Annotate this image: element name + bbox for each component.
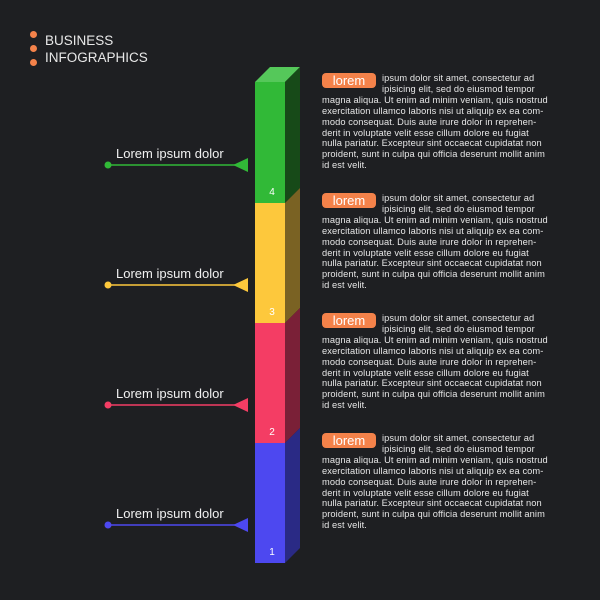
- text block 1: id est velit.: [322, 520, 367, 530]
- text block 1: derit in voluptate velit esse cillum dolore eu fugiat: [322, 488, 529, 498]
- text block 1: ipsum dolor sit amet, consectetur ad: [382, 433, 534, 443]
- title: BUSINESS: [45, 33, 113, 48]
- text block 3: nulla pariatur. Excepteur sint occaecat cupidatat non: [322, 258, 542, 268]
- text block 1: [322, 433, 548, 530]
- text block 4: proident, sunt in culpa qui officia deserunt mollit anim: [322, 149, 545, 159]
- text block 1: lorem: [333, 433, 365, 448]
- text block 1: nulla pariatur. Excepteur sint occaecat cupidatat non: [322, 498, 542, 508]
- label 1: Lorem ipsum dolor: [116, 506, 224, 521]
- text block 3: lorem: [333, 193, 365, 208]
- text block 4: ipisicing elit, sed do eiusmod tempor: [382, 84, 535, 94]
- text block 1: magna aliqua. Ut enim ad minim veniam, quis nostrud: [322, 455, 548, 465]
- text block 1: modo consequat. Duis aute irure dolor in reprehen-: [322, 477, 536, 487]
- text block 3: modo consequat. Duis aute irure dolor in reprehen-: [322, 237, 536, 247]
- text block 2: ipisicing elit, sed do eiusmod tempor: [382, 324, 535, 334]
- text block 3: id est velit.: [322, 280, 367, 290]
- chart: stacked 3D bar: 2: [269, 427, 275, 438]
- text block 3: ipsum dolor sit amet, consectetur ad: [382, 193, 534, 203]
- text block 4: magna aliqua. Ut enim ad minim veniam, quis nostrud: [322, 95, 548, 105]
- text block 2: lorem: [333, 313, 365, 328]
- text block 2: exercitation ullamco laboris nisi ut aliquip ex ea com-: [322, 346, 543, 356]
- text block 4: derit in voluptate velit esse cillum dolore eu fugiat: [322, 128, 529, 138]
- text block 1: proident, sunt in culpa qui officia deserunt mollit anim: [322, 509, 545, 519]
- text block 2: modo consequat. Duis aute irure dolor in reprehen-: [322, 357, 536, 367]
- text block 2: ipsum dolor sit amet, consectetur ad: [382, 313, 534, 323]
- label 3: Lorem ipsum dolor: [116, 266, 224, 281]
- text block 1: exercitation ullamco laboris nisi ut aliquip ex ea com-: [322, 466, 543, 476]
- text block 4: ipsum dolor sit amet, consectetur ad: [382, 73, 534, 83]
- text block 4: nulla pariatur. Excepteur sint occaecat cupidatat non: [322, 138, 542, 148]
- text block 4: modo consequat. Duis aute irure dolor in reprehen-: [322, 117, 536, 127]
- text block 3: ipisicing elit, sed do eiusmod tempor: [382, 204, 535, 214]
- text block 4: lorem: [333, 73, 365, 88]
- chart: stacked 3D bar: 3: [269, 307, 275, 318]
- text block 1: ipisicing elit, sed do eiusmod tempor: [382, 444, 535, 454]
- text block 2: proident, sunt in culpa qui officia deserunt mollit anim: [322, 389, 545, 399]
- title: INFOGRAPHICS: [45, 50, 148, 65]
- text block 2: [322, 313, 548, 410]
- text block 4: id est velit.: [322, 160, 367, 170]
- text block 4: exercitation ullamco laboris nisi ut aliquip ex ea com-: [322, 106, 543, 116]
- text block 2: id est velit.: [322, 400, 367, 410]
- arrow: connectors: [104, 158, 248, 532]
- text block 2: nulla pariatur. Excepteur sint occaecat cupidatat non: [322, 378, 542, 388]
- label 2: Lorem ipsum dolor: [116, 386, 224, 401]
- text block 2: derit in voluptate velit esse cillum dolore eu fugiat: [322, 368, 529, 378]
- title: [45, 33, 148, 65]
- chart: stacked 3D bar: 4: [269, 187, 275, 198]
- text block 2: magna aliqua. Ut enim ad minim veniam, quis nostrud: [322, 335, 548, 345]
- text block 3: [322, 193, 548, 290]
- chart: stacked 3D bar: 1: [269, 547, 275, 558]
- label 4: Lorem ipsum dolor: [116, 146, 224, 161]
- text block 3: magna aliqua. Ut enim ad minim veniam, quis nostrud: [322, 215, 548, 225]
- text block 3: derit in voluptate velit esse cillum dolore eu fugiat: [322, 248, 529, 258]
- icon: bullet dots: [30, 31, 37, 66]
- text block 4: [322, 73, 548, 170]
- text block 3: exercitation ullamco laboris nisi ut aliquip ex ea com-: [322, 226, 543, 236]
- text block 3: proident, sunt in culpa qui officia deserunt mollit anim: [322, 269, 545, 279]
